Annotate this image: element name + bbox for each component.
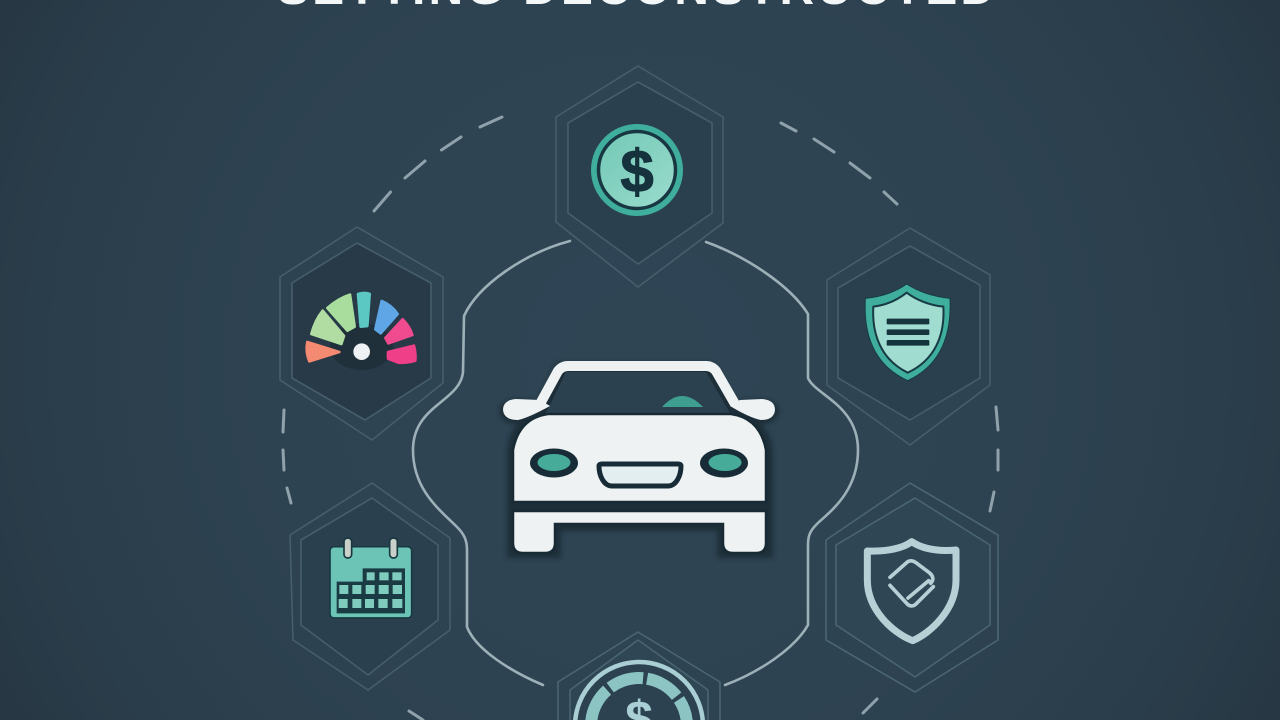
icon: dollar coin xyxy=(591,124,683,216)
dashed orbit ring xyxy=(283,117,998,720)
car headlight left xyxy=(530,448,578,478)
hexagon: bottom, cost xyxy=(558,632,720,720)
car roof xyxy=(540,366,735,404)
icon: outlined shield xyxy=(867,542,956,641)
hexagon: right lower, protection xyxy=(826,483,998,692)
car window xyxy=(546,372,730,413)
car mirrors xyxy=(503,399,775,420)
icon: calendar xyxy=(330,538,412,618)
icon: car front view xyxy=(502,366,776,555)
car body xyxy=(513,414,766,502)
car grille xyxy=(599,464,681,486)
hexagon: right upper, coverage xyxy=(827,228,990,445)
car headlight right xyxy=(700,448,748,478)
icon: credit score gauge xyxy=(307,293,415,370)
hexagon: left lower, calendar xyxy=(290,483,450,690)
car dark halo xyxy=(502,366,776,555)
car window dome xyxy=(662,396,703,407)
hexagon: top, price xyxy=(556,66,723,287)
car bumper and wheels xyxy=(513,511,766,553)
icon: dollar coin: $ xyxy=(620,138,654,205)
hexagon: left upper, credit score xyxy=(280,227,443,440)
central contour outline xyxy=(413,241,858,685)
gauge segment: orange xyxy=(307,342,339,361)
icon: policy shield xyxy=(865,284,950,381)
icon: bottom dial xyxy=(575,662,703,720)
